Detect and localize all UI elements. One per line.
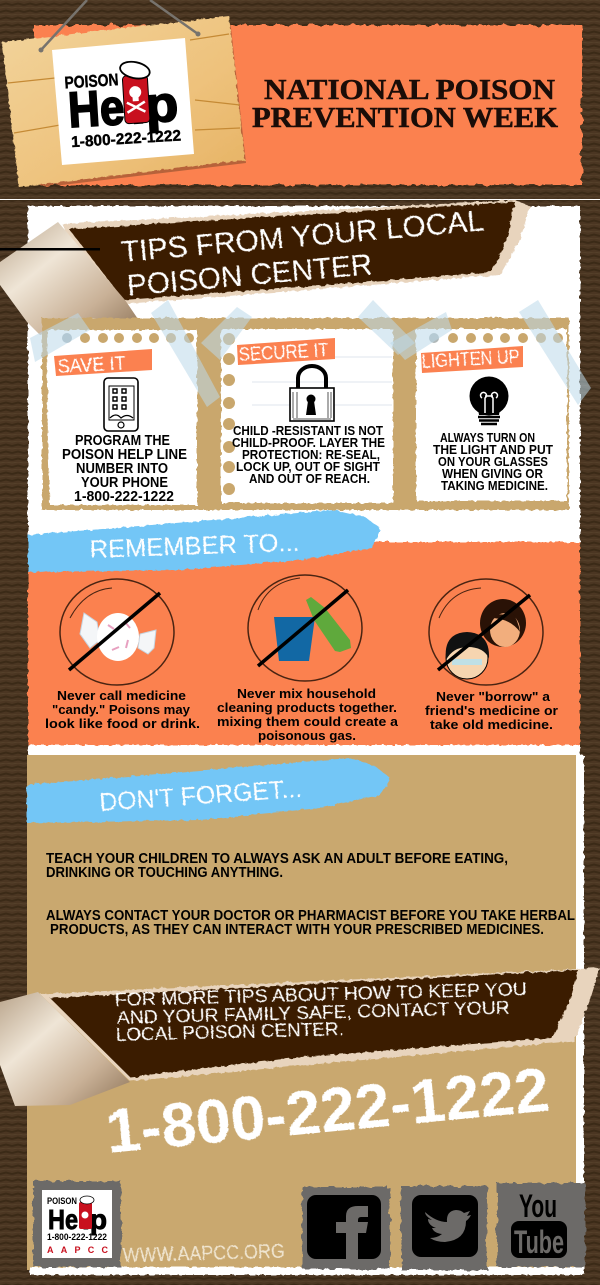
white paper panel xyxy=(28,206,580,758)
remember section xyxy=(28,510,580,745)
text: YOUR PHONE xyxy=(81,475,168,491)
icon: youtube: Tube xyxy=(514,1224,564,1260)
icon: twitter xyxy=(401,1186,487,1270)
white bottom edge xyxy=(30,1267,582,1275)
banner text: AND YOUR FAMILY SAFE, CONTACT YOUR xyxy=(117,998,510,1028)
tip texts: DRINKING OR TOUCHING ANYTHING. xyxy=(46,865,283,881)
text: cleaning products together. xyxy=(217,700,397,715)
footer logo: lp xyxy=(82,1204,107,1235)
text: poisonous gas. xyxy=(258,728,356,743)
text: 1-800-222-1222 xyxy=(74,489,174,505)
tan lower panel xyxy=(27,755,576,1270)
blue brush stroke xyxy=(27,758,390,823)
text: CHILD-PROOF. LAYER THE xyxy=(232,435,385,450)
text: POISON HELP LINE xyxy=(62,447,187,463)
banner heading: TIPS FROM YOUR LOCAL xyxy=(120,204,485,269)
text: WHEN GIVING OR xyxy=(442,466,544,481)
icon: youtube xyxy=(497,1183,585,1267)
text: take old medicine. xyxy=(430,717,553,732)
banner heading xyxy=(120,204,488,303)
header banner xyxy=(2,0,582,190)
tip texts: TEACH YOUR CHILDREN TO ALWAYS ASK AN ADULT BEFORE EATING, xyxy=(46,851,508,867)
icon: facebook xyxy=(302,1187,390,1269)
poison help logo card: POISON xyxy=(64,70,119,92)
icon: candy prohibited xyxy=(60,579,174,685)
footer logo: AAPCC xyxy=(47,1245,108,1255)
banner text: FOR MORE TIPS ABOUT HOW TO KEEP YOU xyxy=(115,979,527,1010)
poison help logo card: 1-800-222-1222 xyxy=(71,127,182,151)
text: TAKING MEDICINE. xyxy=(441,478,548,493)
text: AND OUT OF REACH. xyxy=(249,471,370,486)
website: WWW.AAPCC.ORG xyxy=(123,1241,285,1267)
paper curl xyxy=(0,992,130,1106)
hanging wood sign xyxy=(2,0,246,190)
tape strips xyxy=(30,300,591,407)
torn paper edge xyxy=(62,200,530,304)
dark banner xyxy=(69,202,515,300)
footer logo: 1-800-222-1222 xyxy=(47,1232,107,1242)
note paper xyxy=(221,329,393,503)
tips panel xyxy=(30,300,591,510)
label: LIGHTEN UP xyxy=(421,347,520,373)
text: NUMBER INTO xyxy=(76,461,168,477)
item: mixing xyxy=(217,575,399,743)
text: mixing them could create a xyxy=(217,714,399,729)
text: Never mix household xyxy=(237,686,376,701)
tips banner xyxy=(0,200,530,335)
icon: padlock xyxy=(290,366,334,421)
text: look like food or drink. xyxy=(45,716,200,731)
note: lighten up xyxy=(416,329,567,501)
dark banner xyxy=(50,970,578,1077)
text xyxy=(62,433,187,505)
footer logo: He xyxy=(48,1204,78,1235)
white edge strip xyxy=(570,755,584,1273)
icon: bucket and bottle prohibited xyxy=(248,575,362,681)
torn paper edge xyxy=(40,968,600,1081)
don't forget section xyxy=(27,758,575,938)
title: NATIONAL POISON xyxy=(264,75,555,106)
icon: light bulb xyxy=(470,376,508,424)
text: Never "borrow" a xyxy=(436,689,551,704)
tip texts xyxy=(46,851,575,938)
text: ON YOUR GLASSES xyxy=(438,454,548,469)
icon: faces prohibited xyxy=(429,579,543,685)
footer logo: POISON xyxy=(47,1196,77,1206)
banner text xyxy=(115,979,527,1045)
orange panel xyxy=(28,542,580,745)
text: CHILD -RESISTANT IS NOT xyxy=(233,423,383,438)
blue brush stroke xyxy=(28,510,380,572)
text: PROGRAM THE xyxy=(75,433,170,449)
label xyxy=(54,349,152,378)
note: save it xyxy=(47,330,197,505)
footer xyxy=(33,1181,585,1270)
footer logo xyxy=(33,1181,121,1267)
text: ALWAYS TURN ON xyxy=(440,430,535,445)
text: PROTECTION: RE-SEAL, xyxy=(242,447,380,462)
text: "candy." Poisons may xyxy=(52,702,191,717)
note paper xyxy=(416,329,567,501)
tip texts: PRODUCTS, AS THEY CAN INTERACT WITH YOUR PRESCRIBED MEDICINES. xyxy=(50,922,544,938)
label: SECURE IT xyxy=(238,340,329,366)
paper curl xyxy=(0,222,140,335)
tan backing xyxy=(42,318,569,510)
black line xyxy=(0,248,100,250)
banner text: LOCAL POISON CENTER. xyxy=(116,1019,344,1045)
contact banner xyxy=(0,968,600,1106)
note: secure it xyxy=(221,329,393,503)
item: candy xyxy=(45,579,200,731)
text xyxy=(217,686,399,743)
icon: youtube: You xyxy=(519,1188,557,1224)
poison help logo card xyxy=(52,38,194,165)
poison help logo card: lp xyxy=(128,76,180,134)
note paper xyxy=(47,330,197,505)
banner heading: POISON CENTER xyxy=(126,248,374,303)
title xyxy=(252,75,558,134)
text: friend's medicine or xyxy=(425,703,558,718)
item: borrowing xyxy=(425,579,558,732)
orange title strip xyxy=(34,25,582,185)
icon: phone xyxy=(104,378,138,431)
heading: REMEMBER TO... xyxy=(89,529,300,564)
text xyxy=(45,688,200,731)
text: LOCK UP, OUT OF SIGHT xyxy=(236,459,380,474)
text xyxy=(232,423,385,486)
text xyxy=(433,430,553,493)
heading: DON'T FORGET... xyxy=(98,775,303,817)
phone number: 1-800-222-1222 xyxy=(103,1056,552,1167)
label: SAVE IT xyxy=(57,353,127,378)
title: PREVENTION WEEK xyxy=(252,103,558,134)
poison help logo card: He xyxy=(67,79,126,138)
text xyxy=(425,689,558,732)
text: THE LIGHT AND PUT xyxy=(433,442,553,457)
text: Never call medicine xyxy=(57,688,186,703)
